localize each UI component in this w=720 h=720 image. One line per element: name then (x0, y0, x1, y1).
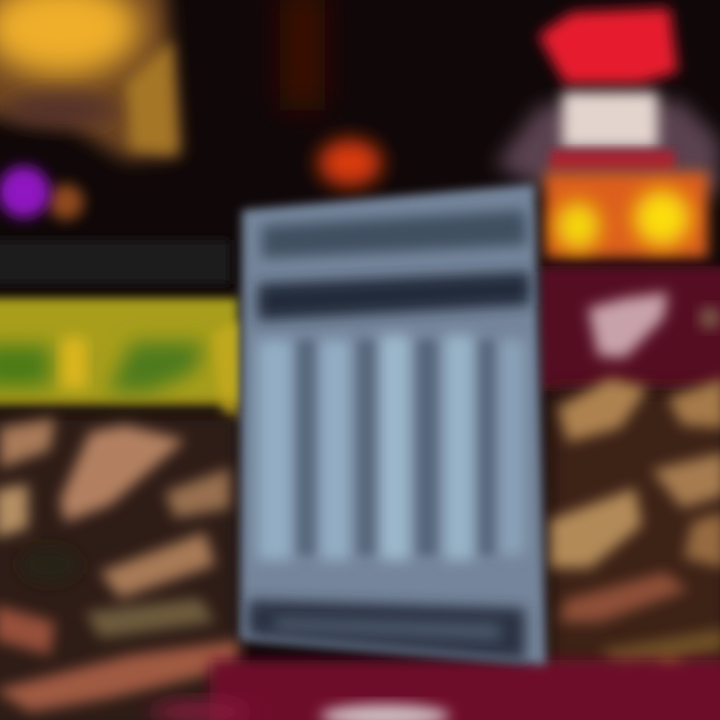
table header (258, 210, 530, 320)
icon: purple circle (0, 166, 84, 220)
panel: yellow green banner (0, 298, 238, 420)
panel: top left burst (0, 0, 180, 160)
table columns (258, 335, 524, 560)
panel: central blue-grey table (240, 184, 546, 665)
panel: right top red hat (495, 8, 720, 195)
panel: right maroon area (540, 266, 720, 391)
panel: right food pile (548, 378, 720, 684)
table footer (248, 600, 525, 660)
panel: bottom maroon strip (150, 660, 720, 720)
panel: right yellow orange band (545, 172, 708, 258)
heading band: dark strip (0, 240, 230, 284)
panel: dark red centre glow (280, 0, 382, 187)
panel: left food pile (0, 412, 240, 720)
